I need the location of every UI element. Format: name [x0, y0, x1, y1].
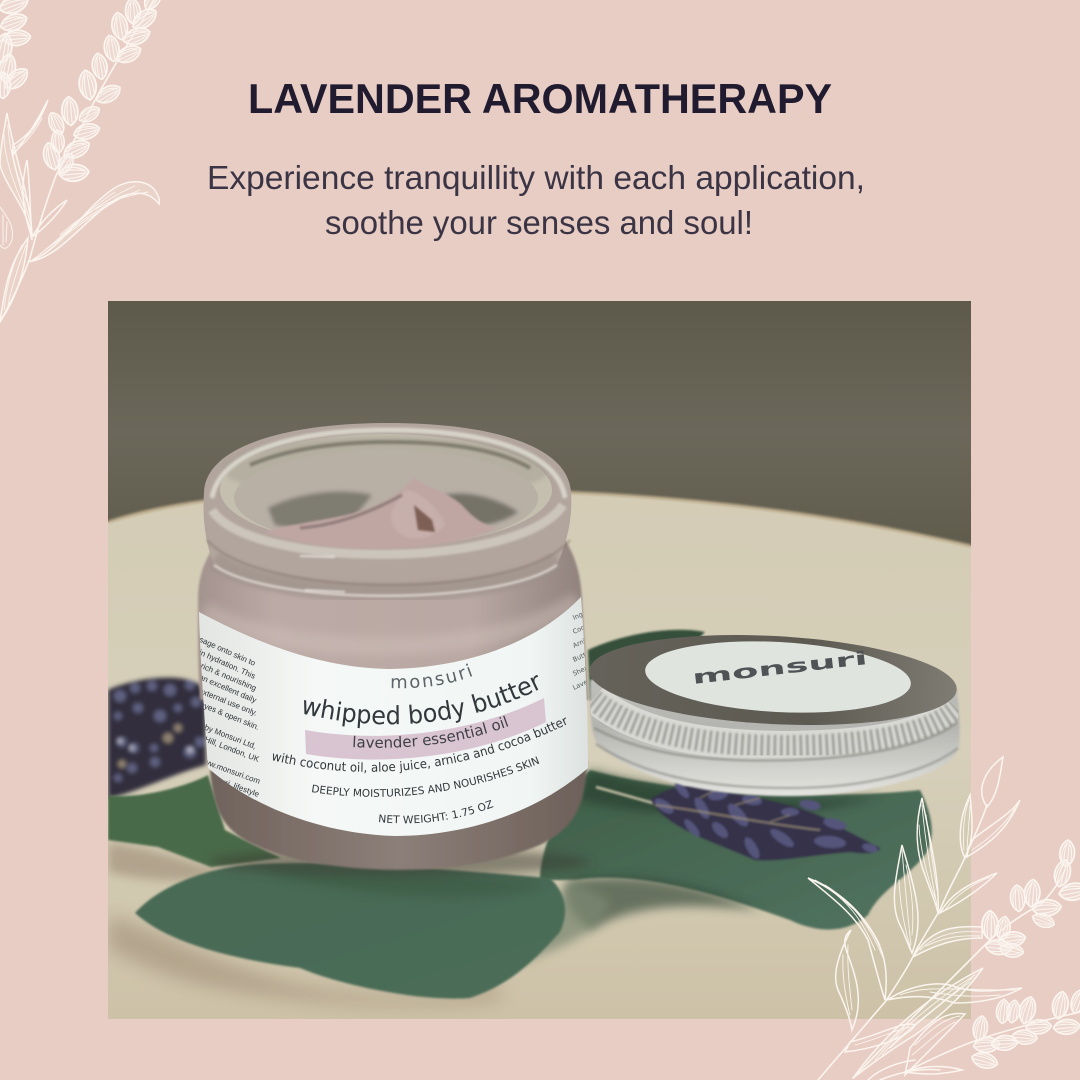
jar lid [587, 626, 960, 796]
floral sprig: top left [0, 0, 165, 322]
subtitle [207, 159, 865, 241]
photo: body butter jar with lid on table [108, 301, 971, 1019]
label side instructions: skin hydration. This [190, 645, 257, 681]
jar [196, 423, 589, 878]
label ingredients: with coconut oil, aloe juice, arnica and cocoa butter [273, 717, 566, 774]
title: LAVENDER AROMATHERAPY [248, 75, 832, 122]
jar: Lavender [571, 672, 603, 692]
label product name: whipped body butter [304, 674, 538, 728]
label side instructions: by Monsuri Ltd, [203, 723, 258, 751]
lid brand text: monsuri [691, 647, 869, 688]
label side instructions: massage onto skin to [184, 629, 257, 668]
eucalyptus leaf: under lid [588, 630, 705, 700]
label side instructions [200, 638, 260, 796]
jar glass neck [203, 423, 571, 596]
label scent: lavender essential oil [353, 716, 508, 748]
lid side silver [589, 678, 960, 798]
glass highlights [212, 430, 565, 498]
label side instructions: Mill Hill, London, UK [190, 730, 261, 764]
body butter inside [265, 478, 497, 549]
label side instructions: is an excellent daily [190, 669, 258, 705]
label net weight: NET WEIGHT: 1.75 OZ [379, 800, 494, 824]
lavender sprig on leaf [596, 780, 880, 861]
table shadows [108, 842, 230, 881]
label claim: DEEPLY MOISTURIZES AND NOURISHES SKIN [312, 756, 540, 797]
jar label [199, 597, 588, 836]
jar base [210, 760, 587, 870]
label side instructions: rich & nourishing [199, 661, 258, 693]
label side instructions: for external use only. [187, 682, 259, 718]
jar shadow [210, 848, 590, 876]
jar: Arnica [571, 634, 593, 650]
jar frosted body [198, 540, 588, 700]
lid thread ridges [594, 698, 958, 746]
jar: Shea [571, 664, 590, 678]
jar: Cocoa [571, 620, 593, 636]
photo backdrop [108, 301, 971, 561]
eucalyptus leaf: left [108, 775, 281, 867]
label side instructions: @monsuri_lifestyle [194, 767, 261, 799]
label side instructions: www.monsuri.com [196, 755, 262, 786]
lid top [589, 635, 957, 725]
lid sticker [645, 641, 911, 713]
jar interior through glass [220, 434, 552, 546]
label brand: monsuri [392, 663, 472, 688]
label purple band [305, 698, 546, 760]
subtitle: Experience tranquillity with each application, [207, 159, 865, 196]
eucalyptus leaf: front [528, 882, 608, 966]
wooden table [108, 491, 971, 1019]
subtitle: soothe your senses and soul! [325, 204, 753, 241]
floral sprig: bottom right [808, 757, 1080, 1080]
left lavender sprig [108, 678, 206, 798]
jar: Ingredients [571, 599, 609, 622]
jar: Butter [571, 648, 594, 664]
label side instructions: avoid eyes & open skin. [179, 692, 261, 732]
